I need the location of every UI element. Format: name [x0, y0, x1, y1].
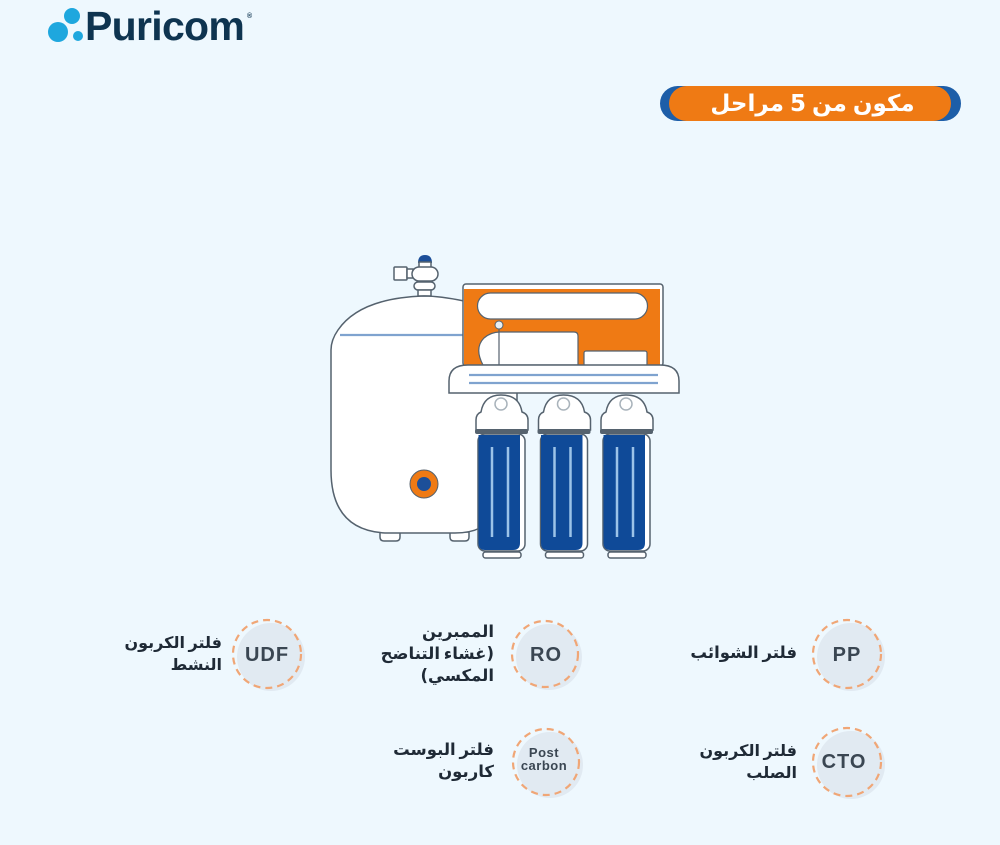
badge: PP: PP: [833, 644, 861, 666]
filter 2: [538, 395, 590, 558]
label: RO: المكسي): [420, 666, 494, 685]
label: RO: (غشاء التناضح: [381, 644, 494, 663]
badge: RO: [512, 621, 582, 690]
label: UDF: النشط: [171, 655, 222, 674]
badge: PP: [813, 620, 885, 691]
label: RO: [381, 622, 494, 685]
badge: stages: [660, 86, 961, 121]
badge: CTO: CTO: [822, 751, 866, 773]
badge: UDF: UDF: [245, 644, 289, 666]
filter 1: [475, 395, 528, 558]
shelf: [449, 365, 679, 393]
badge: Post carbon: carbon: [521, 758, 567, 773]
label: RO: الممبرين: [422, 622, 494, 641]
badge: Post carbon: [513, 729, 583, 798]
filter 3: [600, 395, 653, 558]
badge: RO: RO: [530, 644, 562, 666]
badge pill: [660, 86, 961, 121]
tank feet: [380, 532, 469, 541]
label: PP: فلتر الشوائب: [690, 643, 797, 662]
label: Post carbon: كاربون: [438, 762, 494, 781]
label: Post carbon: [393, 740, 494, 781]
logo: Puricom: [48, 3, 253, 49]
control box: [463, 284, 663, 366]
badge: Post carbon: Post: [529, 745, 559, 760]
badge text: مكون من 5 مراحل: [710, 91, 915, 117]
logo wordmark: Puricom: [85, 3, 244, 49]
label: CTO: الصلب: [746, 763, 797, 782]
logo icon: water drops: [48, 8, 83, 42]
badge: UDF: [233, 620, 305, 691]
badge: CTO: [813, 728, 885, 799]
label: Post carbon: فلتر البوست: [393, 740, 494, 759]
label: UDF: [124, 633, 222, 674]
tank port: [410, 470, 438, 498]
storage tank: [331, 296, 517, 533]
label: CTO: فلتر الكربون: [699, 741, 797, 760]
valve: [394, 255, 438, 296]
label: UDF: فلتر الكربون: [124, 633, 222, 652]
logo registered mark: ®: [247, 12, 253, 20]
label: CTO: [699, 741, 797, 782]
tank band: [340, 334, 464, 336]
